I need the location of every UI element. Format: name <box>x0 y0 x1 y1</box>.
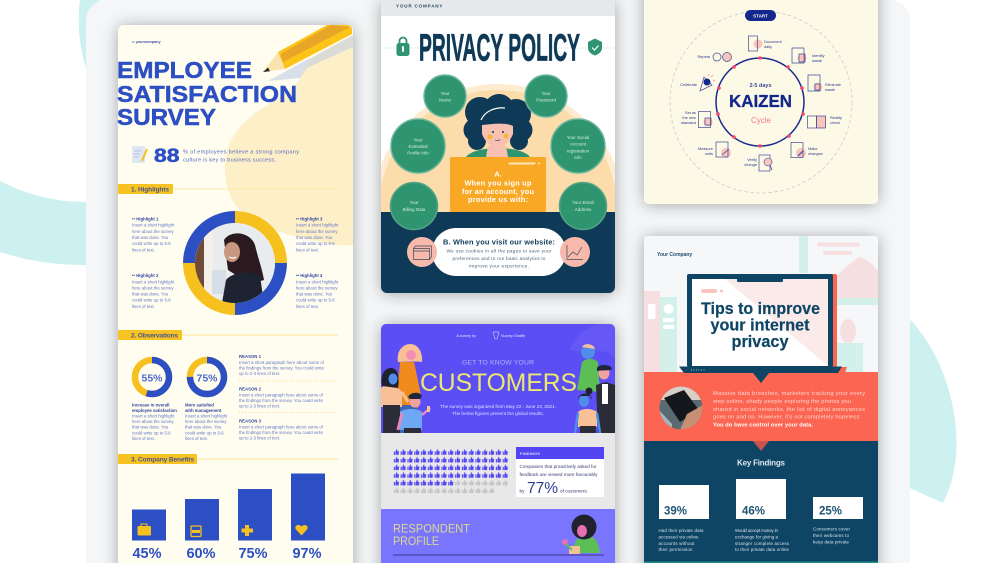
inner cycle ring <box>716 56 805 148</box>
step: repeat <box>697 52 732 62</box>
panel: get to know your customers <box>381 324 615 563</box>
callout A <box>450 157 546 212</box>
heading: respondent profile: PROFILE <box>393 536 439 548</box>
text: highlight 1: could write up to 5-6 <box>132 241 171 246</box>
text: reason 2: up to 2-3 lines of text. <box>239 404 280 408</box>
panel: kaizen cycle <box>644 0 878 204</box>
text: finding 1: accounts without <box>658 541 695 546</box>
coral paragraph: Massive data breaches, marketers tracking your every <box>713 391 865 397</box>
coral paragraph <box>713 391 865 428</box>
bar 97%: 97% <box>292 546 322 562</box>
text: highlight 4: that was done. You <box>296 292 333 296</box>
lilac footer <box>381 509 615 563</box>
decorative room <box>644 236 878 373</box>
text: finding 2 <box>735 528 790 552</box>
step: set as the new standard: the new <box>682 115 696 120</box>
bar 45%: 45% <box>132 546 162 562</box>
panel: employee satisfaction survey <box>117 24 353 563</box>
heading: company benefits <box>118 454 338 464</box>
text: highlight 1: •• Highlight 1 <box>132 216 159 222</box>
bar chart: finding 25% <box>813 497 863 519</box>
text: highlight 4: •• Highlight 4 <box>296 273 323 278</box>
text: finding 3: their webcams to <box>813 533 850 538</box>
step: verify change <box>744 155 772 171</box>
heading: respondent profile: RESPONDENT <box>393 524 470 536</box>
company label: YOUR COMPANY <box>396 4 443 8</box>
icon: lock <box>396 38 410 56</box>
purple header <box>381 324 615 433</box>
company label: •• yourcompany <box>132 40 161 44</box>
text: highlight 2 <box>132 273 175 309</box>
title <box>117 57 297 130</box>
background: teal blob right <box>905 315 956 503</box>
step: identify waste: waste <box>812 58 822 63</box>
text: highlight 3: could write up to 5-6 <box>296 241 335 246</box>
survey credit: A survey by <box>456 334 476 338</box>
callout B <box>432 228 566 276</box>
bar chart: finding 39% <box>659 485 709 519</box>
text: highlight 3 <box>296 216 339 252</box>
bubble: your password: Password <box>536 98 556 102</box>
step: eliminate waste: Eliminate <box>825 82 841 87</box>
donut chart 55% <box>135 360 169 394</box>
bubble: billing data: Billing Data <box>403 207 426 212</box>
text: highlight 4: could write up to 5-6 <box>296 298 335 302</box>
step: set as the new standard <box>681 110 712 128</box>
text: reason 1: REASON 1 <box>239 354 262 359</box>
bubble: social account: Info <box>574 155 582 160</box>
step: repeat: Repeat <box>697 54 711 59</box>
text: finding 3: Consumers cover <box>813 526 851 532</box>
findings card <box>516 447 604 497</box>
text: finding 3 <box>813 526 851 544</box>
bubble: email address: Address <box>575 207 592 212</box>
findings card: Companies that proactively asked for <box>520 464 597 469</box>
survey credit: Survey Giraffe <box>501 334 525 338</box>
start badge: START <box>753 14 768 18</box>
findings card: FINDINGS <box>520 451 540 456</box>
text: finding 1: their permission <box>658 547 693 552</box>
coral paragraph: shared in social networks, the list of digital annoyances <box>713 407 865 413</box>
kaizen center title: KAIZEN <box>729 91 792 111</box>
text: highlight 2: lines of text. <box>132 304 155 309</box>
bubble: billing data <box>390 182 438 230</box>
survey credit <box>456 332 525 339</box>
text: highlight 2: Insert a short highlight <box>132 279 175 284</box>
title: PRIVACY POLICY <box>419 28 580 70</box>
step: celebrate <box>680 74 715 91</box>
text: highlight 3: here about the survey <box>296 229 338 234</box>
step: reality check <box>808 115 842 128</box>
text: reason 1 <box>239 354 325 376</box>
text: highlight 4: lines of text. <box>296 304 319 309</box>
donut chart 75%: 75% <box>196 372 218 384</box>
bubble: your name: Name <box>439 98 451 102</box>
step: measure units: units <box>705 151 713 156</box>
text: finding 2: exchange for giving a <box>735 534 779 540</box>
ring chart with portrait <box>183 211 287 315</box>
text: satisfied with management: Insert a short highlight <box>185 414 228 418</box>
arrow: down to coral <box>753 373 769 383</box>
findings card: 77% <box>527 480 558 497</box>
bar 45% <box>132 510 166 562</box>
arrow: down to navy <box>753 441 769 451</box>
text: employee satisfaction: Insert a short highlight <box>132 414 175 418</box>
bar chart: finding 39%: 39% <box>664 506 687 518</box>
text: highlight 4 <box>296 273 339 309</box>
bubble: extended profile info: Extended <box>408 144 428 149</box>
callout B: improve your experience. <box>469 264 529 268</box>
step: identify waste <box>792 48 825 63</box>
pictogram chart: 77 of 100 <box>393 448 509 494</box>
text: finding 1: accessed via online <box>658 534 699 540</box>
bar chart: company benefits <box>132 474 325 562</box>
header strip <box>381 0 615 16</box>
text: reason 3: REASON 3 <box>239 418 262 424</box>
findings card: of customers. <box>560 489 588 494</box>
text: reason 3: up to 2-3 lines of text. <box>239 436 280 440</box>
text: highlight 3: that was done. You <box>296 235 333 240</box>
text: employee satisfaction: lines of text. <box>132 436 155 441</box>
illustration: customers right <box>575 344 615 433</box>
text: highlight 4: Insert a short highlight <box>296 279 339 284</box>
heading: highlights <box>118 184 338 194</box>
heading: key findings: Key Findings <box>737 458 786 468</box>
text: highlight 1 <box>132 216 175 252</box>
step: document daily: Document <box>764 39 783 44</box>
text: highlight 1: lines of text. <box>132 247 155 252</box>
survey description: The survey was organized from May 22 - June 23, 2021. <box>440 404 556 410</box>
text: satisfied with management: with management <box>184 408 222 413</box>
stat 88 <box>154 145 299 167</box>
text: reason 2 <box>239 386 324 408</box>
bubble: email address <box>560 182 606 230</box>
step: reality check: check <box>830 120 840 125</box>
survey description <box>440 404 556 417</box>
heading: respondent profile <box>393 524 470 548</box>
start badge <box>745 10 776 21</box>
step: measure units: Measure <box>698 146 713 151</box>
text: finding 3: keep data private <box>813 540 850 544</box>
callout B: B. When you visit our website: <box>443 238 555 246</box>
kaizen center title: 2-5 days <box>749 83 772 89</box>
panel: tips to improve internet privacy <box>644 236 878 563</box>
stat 88: 88 <box>154 145 180 167</box>
title: SATISFACTION <box>117 81 297 107</box>
bar 97% <box>291 474 325 562</box>
icon: analytics <box>560 237 590 267</box>
text: finding 2: stranger complete access <box>735 541 790 546</box>
heading: company benefits: 3. Company Benefits <box>131 456 194 463</box>
bar 75%: 75% <box>238 546 268 562</box>
icon: pencil <box>263 24 352 72</box>
step: make changes <box>791 142 823 158</box>
laptop title: Tips to improve <box>701 300 820 318</box>
panel: privacy policy <box>373 0 623 334</box>
text: highlight 1: that was done. You <box>132 235 169 240</box>
bubble: extended profile info <box>391 119 445 173</box>
text: highlight 2: could write up to 5-6 <box>132 298 171 302</box>
bubble: your name <box>424 75 466 117</box>
navy band <box>644 441 878 563</box>
text: highlight 3: lines of text. <box>296 247 319 252</box>
text: employee satisfaction <box>132 402 177 441</box>
text: satisfied with management: here about the survey <box>185 419 227 424</box>
step: verify change: Verify <box>747 157 757 162</box>
bubble: social account <box>551 119 605 173</box>
coral paragraph: You do have control over your data. <box>713 422 813 428</box>
background: teal blob left <box>0 0 100 265</box>
title: CUSTOMERS <box>420 369 577 397</box>
step: make changes: changes <box>808 151 823 156</box>
text: reason 3: Insert a short paragraph here about some of <box>239 424 324 429</box>
heading: highlights: 1. Highlights <box>131 186 169 193</box>
photo: phone in hand <box>659 386 703 430</box>
bubble: extended profile info: Your <box>413 138 423 142</box>
company label: Your Company <box>657 252 692 258</box>
kaizen center title <box>729 83 792 125</box>
text: satisfied with management <box>184 402 228 441</box>
text: employee satisfaction: could write up to 5-6 <box>132 430 171 436</box>
findings card: by <box>520 489 525 494</box>
icon: shield <box>588 38 602 56</box>
text: satisfied with management: lines of text. <box>185 436 208 441</box>
text: finding 1 <box>658 528 704 552</box>
step: set as the new standard: Set as <box>685 110 696 115</box>
heading: observations: 2. Observations <box>131 332 178 339</box>
kaizen center title: Cycle <box>751 116 772 125</box>
text: finding 2: to their private data online <box>735 547 790 552</box>
text: finding 1: Had their private data <box>658 528 704 533</box>
callout A: When you sign up <box>464 178 532 188</box>
laptop: privacy <box>732 333 789 351</box>
stat 88: culture is key to business success. <box>183 158 276 164</box>
step: measure units <box>698 142 731 158</box>
bubble: social account: registration <box>567 148 590 154</box>
navy band <box>381 212 615 293</box>
text: reason 1: Insert a short paragraph here about some of <box>239 360 325 365</box>
step: document daily: daily <box>764 44 772 49</box>
coral paragraph: goes on and on. However, it's not completely hopeless: <box>713 414 861 420</box>
laptop: your internet <box>710 316 810 334</box>
text: highlight 1: Insert a short highlight <box>132 222 175 228</box>
text: highlight 2: •• Highlight 2 <box>132 273 159 278</box>
bubble: your name: Your <box>440 91 450 96</box>
step: set as the new standard: standard <box>681 120 696 125</box>
bar chart: finding 25%: 25% <box>819 506 842 518</box>
bubble: billing data: Your <box>409 200 419 205</box>
step: verify change: change <box>744 162 757 167</box>
icon: notes <box>132 146 147 163</box>
callout A: for an account, you <box>462 187 534 196</box>
stat 88: % of employees believe a strong company <box>183 150 299 156</box>
text: reason 3: the findings from the survey. You could write <box>239 430 324 435</box>
text: highlight 1: here about the survey <box>132 229 174 234</box>
illustration: respondent <box>562 514 600 554</box>
callout A: provide us with: <box>468 195 528 204</box>
text: satisfied with management: that was done. You <box>185 424 222 430</box>
bubble: social account: Your Social <box>567 135 589 140</box>
step: make changes: Make <box>808 146 818 151</box>
step: document daily <box>748 36 783 51</box>
survey description: The below figures present the global results. <box>452 411 544 417</box>
text: employee satisfaction: Increase in overall <box>132 402 170 408</box>
donut chart 75% <box>190 360 224 394</box>
donut chart 55%: 55% <box>141 372 163 384</box>
findings card: feedback are viewed more favourably <box>520 472 598 477</box>
pencil shadow <box>300 35 353 78</box>
text: employee satisfaction: that was done. You <box>132 424 169 430</box>
callout B: We use cookies in all the pages to save your <box>446 248 552 254</box>
text: reason 3 <box>239 418 324 440</box>
bar 60% <box>185 499 219 562</box>
text: reason 1: up to 2-3 lines of text. <box>239 371 280 376</box>
bubble: your password: Your <box>541 91 551 96</box>
bar 75% <box>238 489 272 562</box>
text: reason 1: the findings from the survey. You could write <box>239 365 325 370</box>
step: celebrate: Celebrate <box>680 82 697 87</box>
laptop <box>679 274 847 373</box>
step: identify waste: Identify <box>812 53 825 58</box>
text: highlight 3: Insert a short highlight <box>296 222 339 228</box>
dashed outer cycle <box>670 11 852 193</box>
callout B: preferences and to run basic analytics to <box>452 256 546 261</box>
step: eliminate waste: waste <box>825 87 835 92</box>
bubble: email address: Your Email <box>572 200 594 205</box>
grey strip <box>575 433 600 434</box>
text: highlight 2: here about the survey <box>132 286 174 290</box>
text: highlight 4: here about the survey <box>296 286 338 290</box>
illustration: woman <box>464 94 532 157</box>
icon: browser <box>407 237 437 267</box>
text: finding 2: Would accept money in <box>735 528 779 533</box>
callout A: A. <box>494 170 502 178</box>
illustration: customers left <box>381 344 430 433</box>
bar 60%: 60% <box>186 546 216 562</box>
bar chart: finding 46% <box>736 479 786 519</box>
step: eliminate waste <box>808 75 841 92</box>
coral paragraph: step online, shady people exploring the photos you <box>713 399 851 405</box>
background blob <box>225 47 353 245</box>
text: employee satisfaction: employee satisfaction <box>132 408 177 413</box>
text: satisfied with management: More satisfied <box>185 402 214 408</box>
text: highlight 2: that was done. You <box>132 292 169 296</box>
text: satisfied with management: could write up to 5-6 <box>185 430 224 436</box>
bubble: your password <box>525 75 567 117</box>
title: SURVEY <box>117 104 216 130</box>
text: employee satisfaction: here about the survey <box>132 419 174 424</box>
cream semicircle <box>381 84 615 187</box>
bubble: extended profile info: Profile Info <box>407 150 429 156</box>
text: reason 2: REASON 2 <box>239 386 262 392</box>
coral band <box>644 372 878 441</box>
step: reality check: Reality <box>830 115 842 120</box>
bar chart: finding 46%: 46% <box>742 506 765 518</box>
text: reason 2: Insert a short paragraph here about some of <box>239 392 324 397</box>
title: EMPLOYEE <box>117 57 252 83</box>
text: reason 2: the findings from the survey. You could write <box>239 398 324 403</box>
heading: GET TO KNOW YOUR <box>462 360 534 366</box>
bubble: social account: Account <box>570 142 587 146</box>
heading: observations <box>118 330 338 340</box>
text: highlight 3: •• Highlight 3 <box>296 216 323 222</box>
